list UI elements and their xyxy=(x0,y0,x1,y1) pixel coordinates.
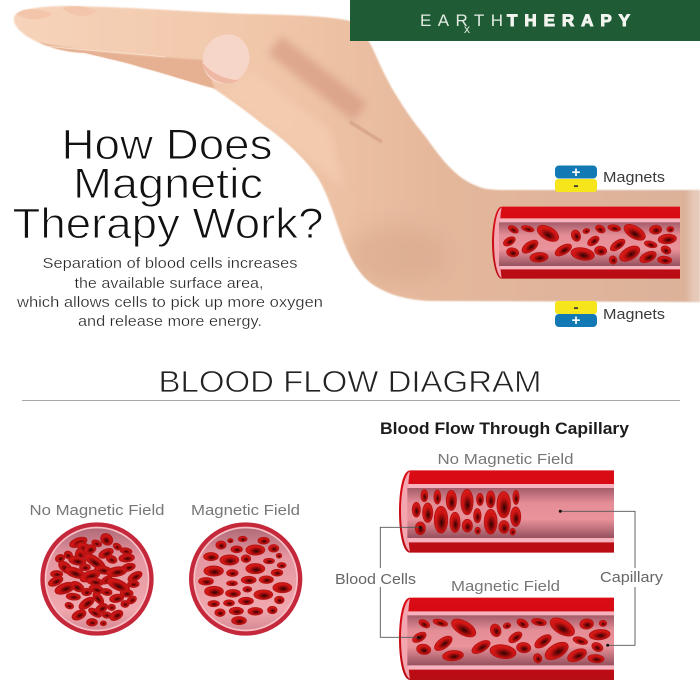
hand illustration xyxy=(14,6,700,307)
label: no magnetic field capillary: No Magnetic Field xyxy=(438,451,574,468)
hand shading xyxy=(38,42,700,307)
logo: THERAPY xyxy=(507,11,631,30)
description text: the available surface area, xyxy=(74,275,264,292)
magnet top xyxy=(555,164,597,194)
title: How Does xyxy=(62,121,272,169)
description text: which allows cells to pick up more oxygen xyxy=(16,294,323,311)
label: no magnetic field circle: No Magnetic Field xyxy=(30,503,164,519)
description text xyxy=(16,255,323,330)
heading: blood flow through capillary: Blood Flow Through Capillary xyxy=(380,420,630,438)
nail: index finger xyxy=(62,6,97,16)
magnet bottom: - xyxy=(574,299,578,316)
title: Therapy Work? xyxy=(12,200,324,248)
magnet top label: Magnets xyxy=(603,169,665,186)
connector: capillary xyxy=(559,510,635,647)
logo: x xyxy=(464,22,470,36)
description text: Separation of blood cells increases xyxy=(42,255,298,272)
title: Magnetic xyxy=(73,160,263,208)
nail: thumb xyxy=(195,27,257,91)
circle: no magnetic field xyxy=(40,522,154,636)
magnet bottom xyxy=(555,299,597,329)
vessel in wrist xyxy=(492,207,680,279)
label: blood cells: Blood Cells xyxy=(335,571,416,588)
label: capillary: Capillary xyxy=(600,569,664,586)
logo xyxy=(420,11,631,36)
magnet top: - xyxy=(574,177,578,194)
label: magnetic field circle: Magnetic Field xyxy=(191,503,300,519)
capillary: magnetic field xyxy=(399,598,614,680)
logo: EARTH xyxy=(420,11,503,30)
magnet top: + xyxy=(572,164,581,181)
nail: middle finger xyxy=(16,9,52,19)
magnet bottom: + xyxy=(572,312,581,329)
title xyxy=(12,121,324,248)
header band xyxy=(350,0,700,41)
connector: blood cells xyxy=(380,526,422,639)
section heading: blood flow diagram: BLOOD FLOW DIAGRAM xyxy=(158,364,542,399)
description text: and release more energy. xyxy=(78,313,262,330)
capillary: no magnetic field xyxy=(399,470,614,553)
circle: magnetic field xyxy=(189,522,302,636)
label: magnetic field capillary: Magnetic Field xyxy=(451,578,560,595)
magnet bottom label: Magnets xyxy=(603,306,665,323)
